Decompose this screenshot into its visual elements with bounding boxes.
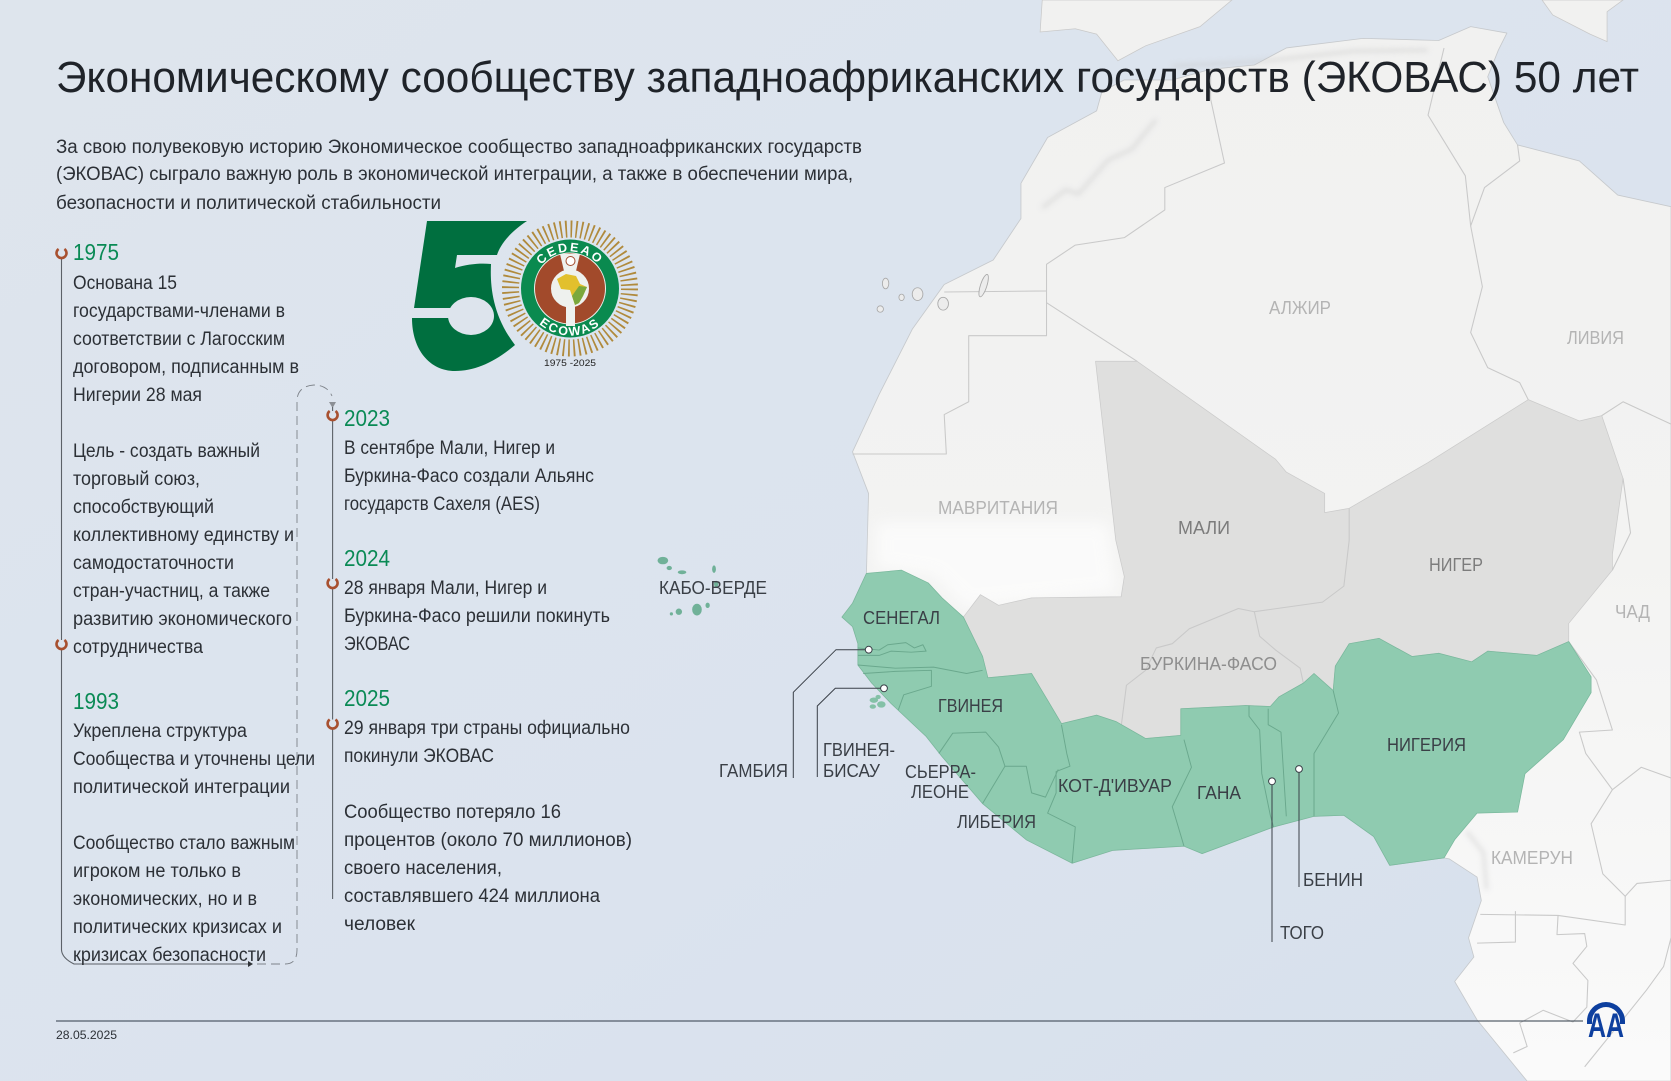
map labels: КОТ-Д'ИВУАР bbox=[1058, 776, 1172, 796]
timeline connector: dashed line bbox=[257, 385, 332, 964]
map labels: БИСАУ bbox=[823, 761, 881, 781]
map labels: НИГЕР bbox=[1429, 555, 1483, 575]
map labels: ЛИБЕРИЯ bbox=[957, 812, 1036, 832]
timeline entry: 1975: самодостаточности bbox=[73, 553, 234, 574]
timeline entry: 2025 bbox=[344, 685, 632, 935]
timeline entry: 1975: договором, подписанным в bbox=[73, 357, 299, 378]
timeline entry: 1975: Цель - создать важный bbox=[73, 441, 260, 462]
map labels: КАМЕРУН bbox=[1491, 848, 1573, 868]
timeline entry: 1975: Нигерии 28 мая bbox=[73, 385, 202, 406]
timeline entry: 2024 bbox=[344, 545, 610, 655]
timeline entry: 1993: игроком не только в bbox=[73, 861, 241, 882]
timeline entry: 2025: 29 января три страны официально bbox=[344, 718, 630, 739]
timeline entry: 2025: 2025 bbox=[344, 685, 390, 711]
timeline entry: 1975: 1975 bbox=[73, 239, 119, 265]
timeline markers bbox=[56, 249, 338, 729]
timeline entry: 1975: стран-участниц, а также bbox=[73, 581, 270, 602]
timeline entry: 1975: развитию экономического bbox=[73, 609, 292, 630]
timeline entry: 1993: политических кризисах и bbox=[73, 917, 282, 938]
light area in southern Mauritania bbox=[876, 522, 1117, 607]
intro text: За свою полувековую историю Экономическое сообщество западноафриканских государств bbox=[56, 137, 862, 158]
map labels: ГАНА bbox=[1197, 783, 1241, 803]
map labels: КАБО-ВЕРДЕ bbox=[659, 578, 767, 598]
map labels: ТОГО bbox=[1280, 923, 1324, 943]
Cape Verde islands bbox=[658, 557, 718, 615]
timeline entry: 2023 bbox=[344, 405, 594, 515]
logo dates: 1975 -2025 bbox=[544, 358, 596, 368]
timeline entry: 2025: своего населения, bbox=[344, 858, 502, 879]
timeline entry: 2023: государств Сахеля (AES) bbox=[344, 494, 540, 515]
emblem bbox=[502, 220, 638, 356]
timeline entry: 1975: сотрудничества bbox=[73, 637, 203, 658]
map labels: ГАМБИЯ bbox=[719, 761, 788, 781]
intro text bbox=[56, 137, 862, 214]
map labels bbox=[659, 298, 1650, 943]
date: 28.05.2025 bbox=[56, 1030, 117, 1042]
timeline entry: 2025: Сообщество потеряло 16 bbox=[344, 802, 561, 823]
AA agency logo: AA bbox=[1588, 1007, 1624, 1045]
timeline entry: 2024: Буркина-Фасо решили покинуть bbox=[344, 606, 610, 627]
timeline entry: 2025: человек bbox=[344, 914, 416, 935]
timeline entry: 2024: ЭКОВАС bbox=[344, 634, 410, 655]
timeline entry: 2024: 2024 bbox=[344, 545, 390, 571]
land: Africa bbox=[842, 27, 1671, 1081]
map labels: МАВРИТАНИЯ bbox=[938, 498, 1058, 518]
timeline entry: 1993 bbox=[73, 688, 315, 966]
timeline entry: 1993: Укреплена структура bbox=[73, 721, 247, 742]
timeline entry: 1993: политической интеграции bbox=[73, 777, 290, 798]
map labels: БЕНИН bbox=[1303, 870, 1363, 890]
Sahel countries in grey: Mali, Burkina Faso, Niger bbox=[963, 361, 1623, 739]
timeline entry: 2025: процентов (около 70 миллионов) bbox=[344, 830, 632, 851]
arrow to dashed segment bbox=[248, 961, 253, 967]
country borders bbox=[853, 48, 1671, 1067]
ECOWAS member states in green bbox=[842, 570, 1591, 865]
map labels: ЧАД bbox=[1615, 602, 1650, 622]
map labels: ГВИНЕЯ- bbox=[823, 740, 895, 760]
intro text: (ЭКОВАС) сыграло важную роль в экономической интеграции, а также в обеспечении мира, bbox=[56, 164, 853, 185]
map labels: СЬЕРРА- bbox=[905, 762, 976, 782]
timeline entry: 1975 bbox=[73, 239, 299, 658]
timeline connector: right solid line bbox=[332, 407, 334, 899]
timeline entry: 1975: способствующий bbox=[73, 497, 214, 518]
title: Экономическому сообществу западноафриканских государств (ЭКОВАС) 50 лет bbox=[56, 53, 1639, 102]
timeline entry: 2023: Буркина-Фасо создали Альянс bbox=[344, 466, 594, 487]
footer rule bbox=[56, 1020, 1583, 1022]
logo: ECOWAS 50 years bbox=[412, 220, 638, 371]
timeline entry: 1993: Сообщество стало важным bbox=[73, 833, 295, 854]
timeline entry: 1975: торговый союз, bbox=[73, 469, 200, 490]
timeline entry: 1975: государствами-членами в bbox=[73, 301, 285, 322]
timeline entry: 2025: покинули ЭКОВАС bbox=[344, 746, 494, 767]
timeline entry: 1993: 1993 bbox=[73, 688, 119, 714]
timeline entry: 1975: Основана 15 bbox=[73, 273, 177, 294]
AA agency logo bbox=[1587, 1002, 1625, 1045]
big numeral 5 bbox=[412, 221, 527, 371]
map labels: СЕНЕГАЛ bbox=[863, 608, 940, 628]
timeline entry: 2025: составлявшего 424 миллиона bbox=[344, 886, 600, 907]
Sicily bbox=[1542, 0, 1623, 42]
map labels: МАЛИ bbox=[1178, 518, 1230, 538]
timeline entry: 1993: кризисах безопасности bbox=[73, 945, 266, 966]
map labels: АЛЖИР bbox=[1269, 298, 1331, 318]
intro text: безопасности и политической стабильности bbox=[56, 193, 441, 214]
map labels: ЛИВИЯ bbox=[1567, 328, 1624, 348]
leader lines with location dots bbox=[793, 646, 1302, 942]
map labels: ЛЕОНЕ bbox=[911, 782, 969, 802]
map labels: НИГЕРИЯ bbox=[1387, 735, 1466, 755]
timeline entry: 2024: 28 января Мали, Нигер и bbox=[344, 578, 547, 599]
timeline connector: left solid line bbox=[62, 253, 248, 964]
timeline entry: 1993: Сообщества и уточнены цели bbox=[73, 749, 315, 770]
member state borders bbox=[858, 643, 1339, 863]
timeline entry: 2023: 2023 bbox=[344, 405, 390, 431]
Canary Islands bbox=[877, 273, 990, 312]
timeline entry: 1993: экономических, но и в bbox=[73, 889, 257, 910]
arrow into right timeline bbox=[329, 402, 336, 408]
map labels: ГВИНЕЯ bbox=[938, 696, 1003, 716]
emblem: CEDEAO bbox=[537, 242, 602, 263]
Bissagos islands bbox=[870, 695, 886, 709]
Spain bbox=[1040, 0, 1232, 61]
emblem: ECOWAS bbox=[540, 317, 598, 336]
map labels: БУРКИНА-ФАСО bbox=[1140, 654, 1277, 674]
timeline entry: 1975: коллективному единству и bbox=[73, 525, 294, 546]
timeline entry: 1975: соответствии с Лагосским bbox=[73, 329, 285, 350]
map of West Africa bbox=[658, 0, 1671, 1081]
timeline entry: 2023: В сентябре Мали, Нигер и bbox=[344, 438, 555, 459]
terrain shading: Atlas and Cameroon highlands bbox=[1042, 50, 1487, 890]
